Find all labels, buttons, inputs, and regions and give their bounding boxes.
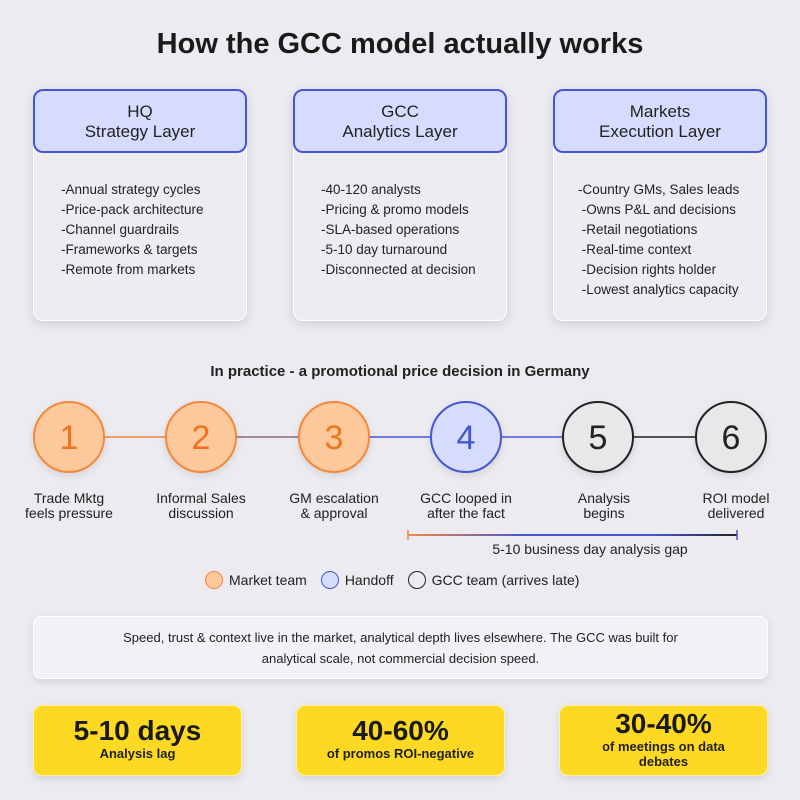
label 3: GM escalation (289, 490, 379, 506)
list: GCC: -5-10 day turnaround (321, 242, 447, 257)
subheading: In practice - a promotional price decision in Germany (210, 363, 590, 380)
step 4: 4 (457, 419, 475, 457)
list: GCC: -SLA-based operations (321, 222, 459, 237)
heading: GCC: GCC (381, 102, 419, 121)
heading: Markets: Execution Layer (599, 122, 721, 141)
list: HQ: -Frameworks & targets (61, 242, 198, 257)
heading: HQ: Strategy Layer (85, 122, 195, 141)
callout: analytical scale, not commercial decision speed. (262, 651, 539, 666)
label 6: ROI model (703, 490, 769, 506)
stat: ROI-negative (296, 705, 505, 776)
heading: GCC: Analytics Layer (342, 122, 458, 141)
list: Markets (578, 182, 739, 297)
label 2: discussion (168, 505, 234, 521)
label 4 (420, 490, 512, 521)
list: GCC: -40-120 analysts (321, 182, 421, 197)
panel: HQ strategy layer (33, 89, 247, 321)
step 6: 6 (722, 419, 740, 457)
list: GCC: -Disconnected at decision (321, 262, 476, 277)
callout (33, 616, 768, 679)
stat: analysis lag: Analysis lag (100, 746, 175, 761)
stat: meetings: 30-40% (615, 708, 712, 739)
step 2: 2 (192, 419, 210, 457)
heading: GCC (293, 89, 507, 153)
list: HQ: -Annual strategy cycles (61, 182, 201, 197)
heading: HQ (33, 89, 247, 153)
label 1: Trade Mktg (34, 490, 104, 506)
callout: Speed, trust & context live in the market, analytical depth lives elsewhere. The GCC was built for (123, 630, 678, 645)
list: HQ: -Remote from markets (61, 262, 195, 277)
gap label: 5-10 business day analysis gap (492, 541, 688, 557)
label 2 (156, 490, 246, 521)
list: HQ (61, 182, 204, 277)
list: GCC (321, 182, 476, 277)
stat: meetings: of meetings on data (602, 739, 725, 754)
stat: analysis lag: 5-10 days (74, 715, 201, 746)
list: Markets: -Decision rights holder (582, 262, 716, 277)
label 3 (289, 490, 379, 521)
step 3 (298, 401, 370, 473)
panel: Markets execution layer (553, 89, 767, 321)
stat: ROI-negative: of promos ROI-negative (327, 746, 474, 761)
list: Markets: -Country GMs, Sales leads (578, 182, 739, 197)
label 6 (703, 490, 769, 521)
legend: Market team Handoff GCC team (arrives late) (229, 572, 579, 588)
list: Markets: -Retail negotiations (582, 222, 697, 237)
label 1: feels pressure (25, 505, 113, 521)
step 5: 5 (589, 419, 607, 457)
list: HQ: -Channel guardrails (61, 222, 179, 237)
label 4: after the fact (427, 505, 505, 521)
stat: analysis lag (33, 705, 242, 776)
step 1: 1 (60, 419, 78, 457)
list: HQ: -Price-pack architecture (61, 202, 204, 217)
step 5 (562, 401, 634, 473)
label 5 (578, 490, 630, 521)
title: How the GCC model actually works (157, 28, 643, 60)
list: GCC: -Pricing & promo models (321, 202, 469, 217)
label 5: begins (583, 505, 625, 521)
label 2: Informal Sales (156, 490, 246, 506)
step 2 (165, 401, 237, 473)
label 4: GCC looped in (420, 490, 512, 506)
list: Markets: -Owns P&L and decisions (582, 202, 736, 217)
stat: meetings (559, 705, 768, 776)
heading: Markets: Markets (630, 102, 690, 121)
stat: ROI-negative: 40-60% (352, 715, 449, 746)
label 5: Analysis (578, 490, 630, 506)
label 6: delivered (708, 505, 764, 521)
step 6 (695, 401, 767, 473)
list: Markets: -Lowest analytics capacity (582, 282, 739, 297)
panel: GCC analytics layer (293, 89, 507, 321)
label 1 (25, 490, 113, 521)
step 1 (33, 401, 105, 473)
list: Markets: -Real-time context (582, 242, 691, 257)
stat: meetings: debates (639, 754, 688, 769)
heading: Markets (553, 89, 767, 153)
heading: HQ: HQ (127, 102, 153, 121)
step 3: 3 (325, 419, 343, 457)
step 4 (430, 401, 502, 473)
label 3: & approval (301, 505, 367, 521)
